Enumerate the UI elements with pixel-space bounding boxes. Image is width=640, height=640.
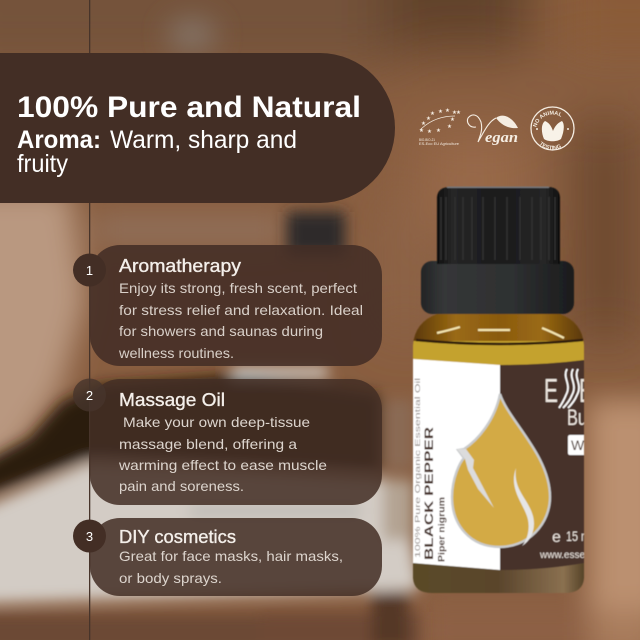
vertical product name: Piper nigrum <box>436 497 448 562</box>
aromatherapy text: wellness routines. <box>118 345 234 361</box>
icon: EU organic leaf: ★ <box>427 128 432 135</box>
massage oil text: pain and soreness. <box>119 478 244 494</box>
aromatherapy heading: Aromatherapy <box>119 256 241 276</box>
icon: EU organic leaf: ★ <box>452 109 457 116</box>
number badge 1: 1 <box>86 263 93 278</box>
icon: EU organic leaf: BIO-BIO-21 <box>419 138 435 142</box>
logo swoosh <box>559 369 579 408</box>
aromatherapy text: for stress relief and relaxation. Ideal <box>119 302 363 318</box>
aromatherapy text: for showers and saunas during <box>119 323 323 339</box>
icon: no animal testing <box>530 106 575 151</box>
volume and website <box>539 530 585 559</box>
aroma description: Aroma: <box>17 126 101 154</box>
product bottle <box>413 186 593 595</box>
icon: EU organic leaf: ★ <box>419 127 424 134</box>
volume tag: Wa <box>571 437 592 453</box>
icon: no animal testing: TESTING <box>540 141 561 150</box>
collar <box>421 261 574 314</box>
panel: aromatherapy <box>73 245 382 366</box>
icon: EU organic leaf: ★ <box>450 116 455 123</box>
glass body <box>413 314 593 595</box>
volume and website: www.esse <box>539 550 585 561</box>
icon: vegan <box>467 115 518 146</box>
icon: EU organic leaf: ★ <box>445 107 450 114</box>
vertical product name: 100% Pure Organic Essential Oil <box>415 377 422 558</box>
number badge 1 <box>73 254 106 286</box>
aroma description: Warm, sharp and <box>110 126 297 154</box>
oil drop <box>452 394 550 547</box>
icon: EU organic leaf: ★ <box>430 110 435 117</box>
diy cosmetics text: or body sprays. <box>119 570 222 586</box>
label: brown panel <box>500 360 584 570</box>
icon: EU organic leaf: ★ <box>421 120 426 127</box>
massage oil text: Make your own deep-tissue <box>123 414 310 430</box>
massage oil text: warming effect to ease muscle <box>118 457 327 473</box>
icon: EU organic leaf: ★ <box>426 115 431 122</box>
icon: EU organic leaf: ★ <box>436 127 441 134</box>
volume and website: 15 m <box>566 528 590 544</box>
diy cosmetics text: Great for face masks, hair masks, <box>119 548 343 564</box>
vertical product name: BLACK PEPPER <box>424 426 436 560</box>
panel: massage oil <box>73 378 382 505</box>
panel: header <box>0 53 395 203</box>
massage oil text <box>118 414 327 494</box>
icon: EU organic leaf: ES-Eco EU Agriculture <box>419 142 459 146</box>
timeline line <box>89 0 90 640</box>
aroma description: fruity <box>17 150 68 178</box>
number badge 3: 3 <box>86 529 93 544</box>
diy cosmetics text <box>119 548 343 586</box>
brand text: E <box>544 372 558 409</box>
cap <box>437 186 560 264</box>
icon: EU organic leaf: ★ <box>438 108 443 115</box>
massage oil text: massage blend, offering a <box>119 436 297 452</box>
icon: EU organic leaf <box>419 107 461 146</box>
panel: diy cosmetics <box>73 518 382 596</box>
vertical product name <box>415 377 448 562</box>
volume tag <box>567 434 585 456</box>
number badge 2 <box>73 378 106 412</box>
brand text: Bu <box>567 405 587 430</box>
icon: EU organic leaf: ★ <box>456 109 461 116</box>
brand text: E <box>579 372 593 409</box>
icon: vegan: egan <box>485 130 518 146</box>
volume and website: e <box>552 529 561 546</box>
icon: EU organic leaf: ★ <box>447 123 452 130</box>
massage oil heading: Massage Oil <box>119 390 225 410</box>
number badge 3 <box>73 520 106 552</box>
label: white panel <box>413 359 500 570</box>
aromatherapy text: Enjoy its strong, fresh scent, perfect <box>119 280 357 296</box>
brand text <box>544 378 585 426</box>
aromatherapy text <box>118 280 363 361</box>
number badge 2: 2 <box>86 388 93 403</box>
icon: no animal testing: NO ANIMAL <box>532 110 562 127</box>
diy cosmetics heading: DIY cosmetics <box>119 527 236 547</box>
title: 100% Pure and Natural <box>17 91 361 124</box>
aroma description <box>17 126 297 178</box>
